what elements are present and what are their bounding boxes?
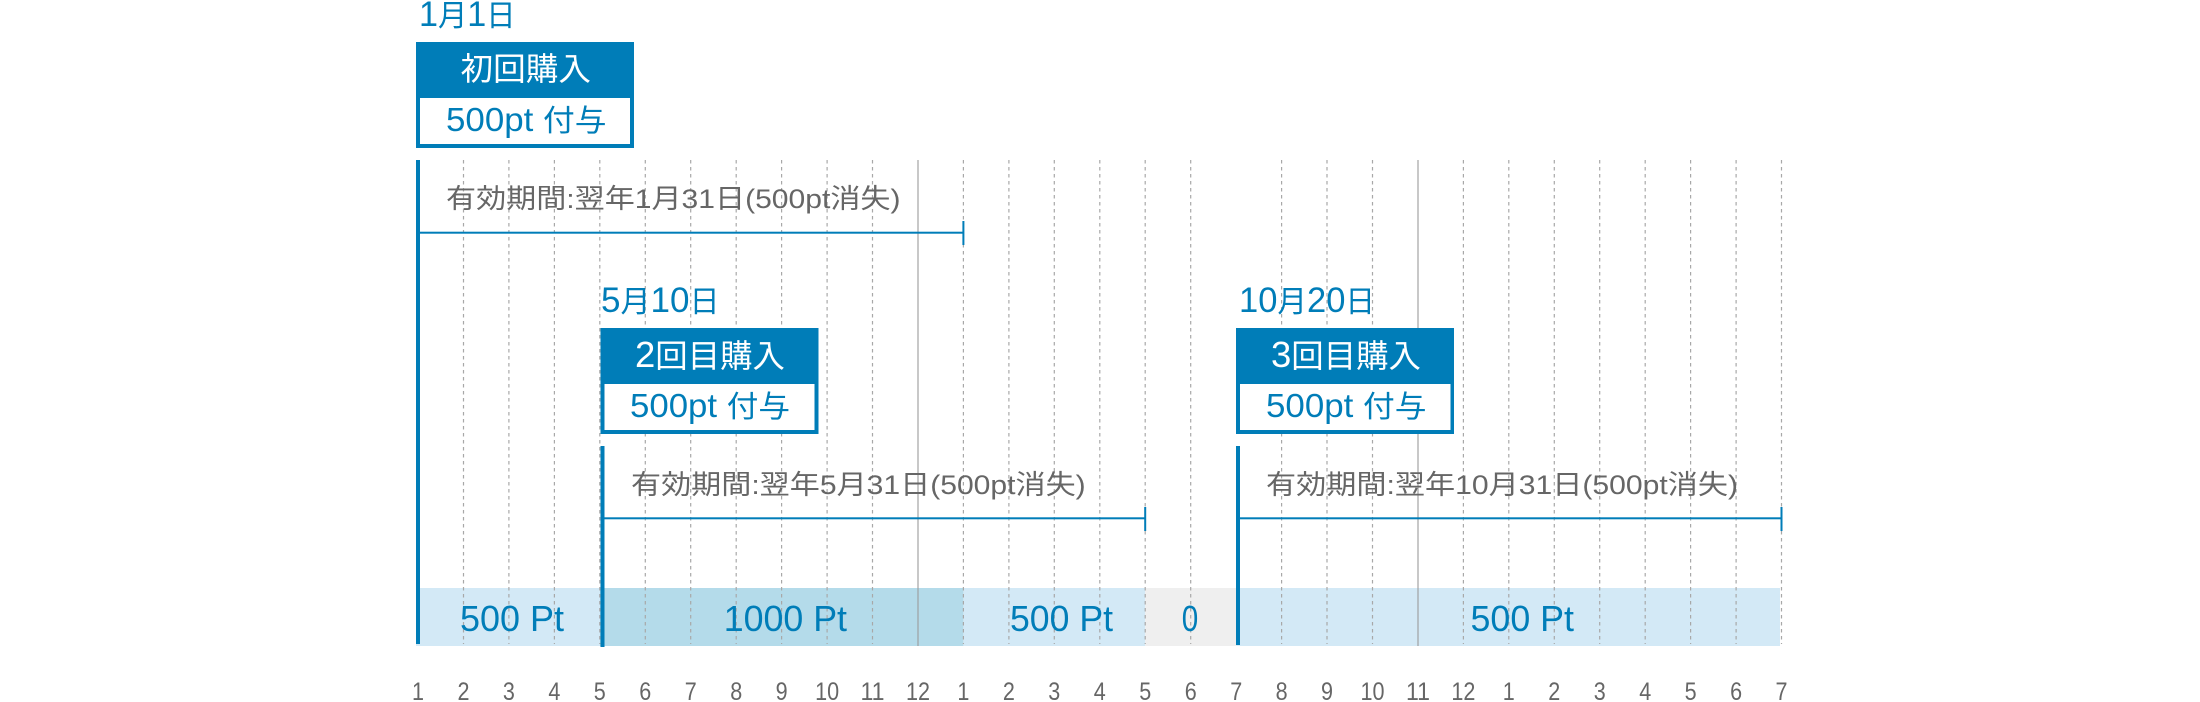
band: zero balance period — [1145, 588, 1236, 646]
validity marker: first purchase — [416, 160, 964, 644]
purchase box: second: 500pt 付与 — [630, 387, 790, 424]
date: October 20: 10月20日 — [1239, 281, 1375, 320]
balance labels: 500 Pt — [460, 598, 564, 639]
purchase box: first — [416, 42, 634, 148]
balance labels — [460, 598, 1574, 639]
month grid lines — [464, 160, 1782, 646]
band: 500 Pt third period — [1236, 588, 1780, 646]
band: 1000 Pt period — [600, 588, 963, 646]
balance labels: 500 Pt — [1010, 598, 1113, 639]
validity text: third purchase: 有効期間:翌年10月31日(500pt消失) — [1266, 470, 1738, 500]
balance labels: 1000 Pt — [724, 598, 847, 639]
purchase box: third: 3回目購入 — [1271, 334, 1421, 375]
validity text: second purchase: 有効期間:翌年5月31日(500pt消失) — [631, 470, 1086, 500]
balance bands — [416, 588, 1780, 646]
validity marker: second purchase — [600, 446, 1146, 647]
band: 500 Pt first period — [416, 588, 600, 646]
band: 500 Pt second period — [963, 588, 1145, 646]
validity text: first purchase: 有効期間:翌年1月31日(500pt消失) — [446, 184, 900, 214]
validity marker: third purchase — [1236, 446, 1782, 645]
purchase box: first: 500pt 付与 — [446, 101, 606, 138]
date: May 10: 5月10日 — [601, 281, 720, 320]
purchase box: second: 2回目購入 — [635, 334, 785, 375]
purchase box: third: 500pt 付与 — [1266, 387, 1426, 424]
balance labels: 500 Pt — [1470, 598, 1574, 639]
purchase box: second — [600, 328, 818, 434]
purchase box: third — [1236, 328, 1454, 434]
purchase box: first: 初回購入 — [460, 51, 591, 87]
balance labels: 0 — [1182, 598, 1198, 639]
month axis labels — [412, 678, 1788, 702]
